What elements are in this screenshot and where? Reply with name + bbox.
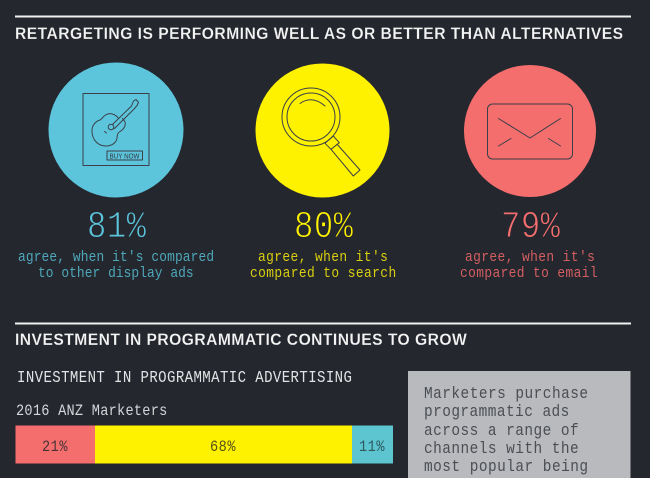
heading: retargeting: RETARGETING IS PERFORMING WELL AS OR BETTER THAN ALTERNATIVES [15, 24, 623, 43]
callout: channels: channels with the [424, 439, 579, 458]
text: search comparison: agree, when it's [258, 249, 388, 266]
stat: 79%: 79% [501, 206, 561, 249]
stat: 81%: 81% [87, 206, 147, 249]
chart subtitle: 2016 ANZ Marketers [16, 403, 167, 420]
panel: display ads [18, 62, 214, 282]
text: email comparison [460, 249, 598, 282]
icon: envelope [464, 65, 596, 197]
stat: 80%: 80% [294, 206, 354, 249]
text: email comparison: compared to email [460, 265, 598, 282]
stacked bar chart [16, 426, 393, 464]
text: search comparison [250, 249, 396, 282]
stacked bar chart: 21% [42, 439, 68, 456]
panel: email [460, 65, 598, 282]
callout: channels: across a range of [424, 421, 579, 440]
text: email comparison: agree, when it's [465, 249, 595, 266]
callout: channels [408, 371, 630, 478]
panel: search [250, 64, 396, 282]
stacked bar chart: 11% [359, 439, 385, 456]
text: display ads comparison [18, 249, 214, 282]
icon: guitar product ad: BUY NOW [110, 152, 140, 160]
chart title: INVESTMENT IN PROGRAMMATIC ADVERTISING [17, 368, 352, 387]
callout: channels: Marketers purchase [424, 384, 588, 403]
callout: channels: most popular being [424, 457, 588, 476]
stacked bar chart: 68% [210, 439, 236, 456]
icon: guitar product ad [48, 62, 184, 198]
callout: channels: programmatic ads [424, 402, 569, 421]
text: display ads comparison: to other display ads [38, 265, 194, 282]
icon: magnifying glass [256, 64, 390, 198]
text: search comparison: compared to search [250, 265, 396, 282]
heading: investment: INVESTMENT IN PROGRAMMATIC CONTINUES TO GROW [15, 330, 467, 349]
text: display ads comparison: agree, when it's compared [18, 249, 214, 266]
